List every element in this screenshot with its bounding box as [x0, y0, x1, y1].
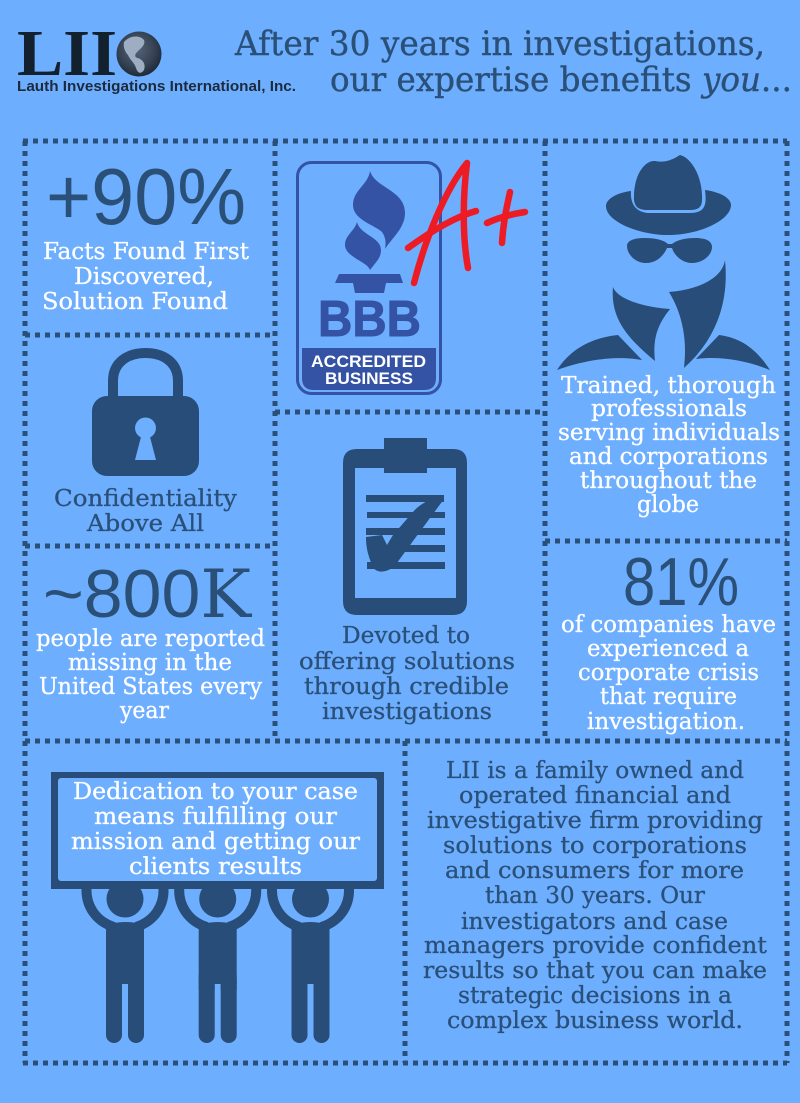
panel: company description: and consumers for more — [445, 856, 744, 884]
panel: BBB accreditation — [298, 162, 525, 394]
stat: +90%: +90% — [46, 152, 246, 241]
caption: globe — [637, 490, 699, 518]
stat caption — [36, 624, 265, 724]
caption: serving individuals — [558, 418, 780, 446]
badge outline — [298, 162, 440, 394]
title: After 30 years in investigations, — [234, 24, 765, 64]
title — [234, 24, 792, 100]
caption — [299, 621, 515, 725]
panel: confidentiality — [54, 353, 238, 537]
caption: professionals — [591, 394, 747, 422]
accredited business band — [302, 348, 436, 390]
sign text: Dedication to your case — [73, 777, 358, 805]
logo — [17, 17, 296, 95]
panel: trained professionals — [557, 155, 780, 518]
icon: three people holding sign — [51, 772, 384, 1043]
stat caption: United States every — [39, 672, 263, 700]
sign text: mission and getting our — [71, 827, 361, 855]
icon: spy — [557, 155, 770, 370]
panel: company description: investigative firm providing — [427, 806, 763, 834]
panel: company description: managers provide confident — [424, 931, 768, 959]
panel: dedication — [51, 772, 384, 1043]
caption: investigations — [322, 697, 492, 725]
stat caption: that require — [600, 682, 737, 710]
caption: throughout the — [580, 466, 757, 494]
stat caption: people are reported — [36, 624, 265, 652]
sign text — [71, 777, 361, 880]
icon: BBB torch — [335, 171, 405, 293]
panel: facts found — [42, 152, 250, 315]
caption: and corporations — [569, 442, 768, 470]
panel: company description: than 30 years. Our — [485, 881, 706, 909]
stat caption: Discovered, — [74, 262, 214, 290]
icon: globe — [116, 32, 162, 76]
panel: company description: operated financial and — [459, 781, 731, 809]
stat caption: of companies have — [561, 610, 776, 638]
BBB letters: BBB — [318, 290, 421, 347]
stat caption: missing in the — [68, 648, 232, 676]
icon: padlock — [92, 353, 199, 476]
accredited business band: ACCREDITED — [311, 352, 426, 371]
caption: Trained, thorough — [561, 371, 776, 399]
stat caption — [561, 610, 776, 735]
A+ rating — [408, 163, 525, 283]
panel: company description: results so that you can make — [423, 956, 767, 984]
panel: company description — [423, 756, 768, 1034]
caption — [54, 484, 238, 537]
title: our expertise benefits you... — [330, 60, 792, 100]
stat caption: Facts Found First — [43, 237, 250, 265]
stat: 81%: 81% — [623, 544, 739, 620]
stat: ~800K: ~800K — [43, 556, 253, 633]
stat caption: Solution Found — [42, 287, 228, 315]
caption: offering solutions — [299, 647, 515, 675]
sign text: clients results — [129, 852, 302, 880]
panel: corporate crisis — [561, 544, 776, 735]
panel: credible investigations — [299, 438, 515, 725]
icon: clipboard with check — [343, 438, 467, 615]
panel: company description: solutions to corporations — [443, 831, 747, 859]
stat caption — [42, 237, 250, 315]
stat caption: year — [119, 696, 170, 724]
company name: Lauth Investigations International, Inc. — [17, 78, 296, 95]
accredited business band: BUSINESS — [325, 369, 413, 388]
panel: company description: LII is a family owned and — [446, 756, 744, 784]
caption: through credible — [304, 672, 509, 700]
stat caption: corporate crisis — [578, 658, 759, 686]
caption: Devoted to — [342, 621, 470, 649]
caption: Confidentiality — [54, 484, 238, 512]
caption: Above All — [86, 509, 204, 537]
sign text: means fulfilling our — [94, 802, 338, 830]
caption — [558, 371, 780, 518]
panel: company description: strategic decisions in a — [458, 981, 732, 1009]
panel: company description: complex business world. — [447, 1006, 743, 1034]
stat caption: investigation. — [587, 707, 745, 735]
stat caption: experienced a — [587, 634, 749, 662]
logo letters: LII — [17, 17, 117, 90]
panel: missing people — [36, 556, 265, 724]
panel: company description: investigators and case — [461, 907, 728, 935]
